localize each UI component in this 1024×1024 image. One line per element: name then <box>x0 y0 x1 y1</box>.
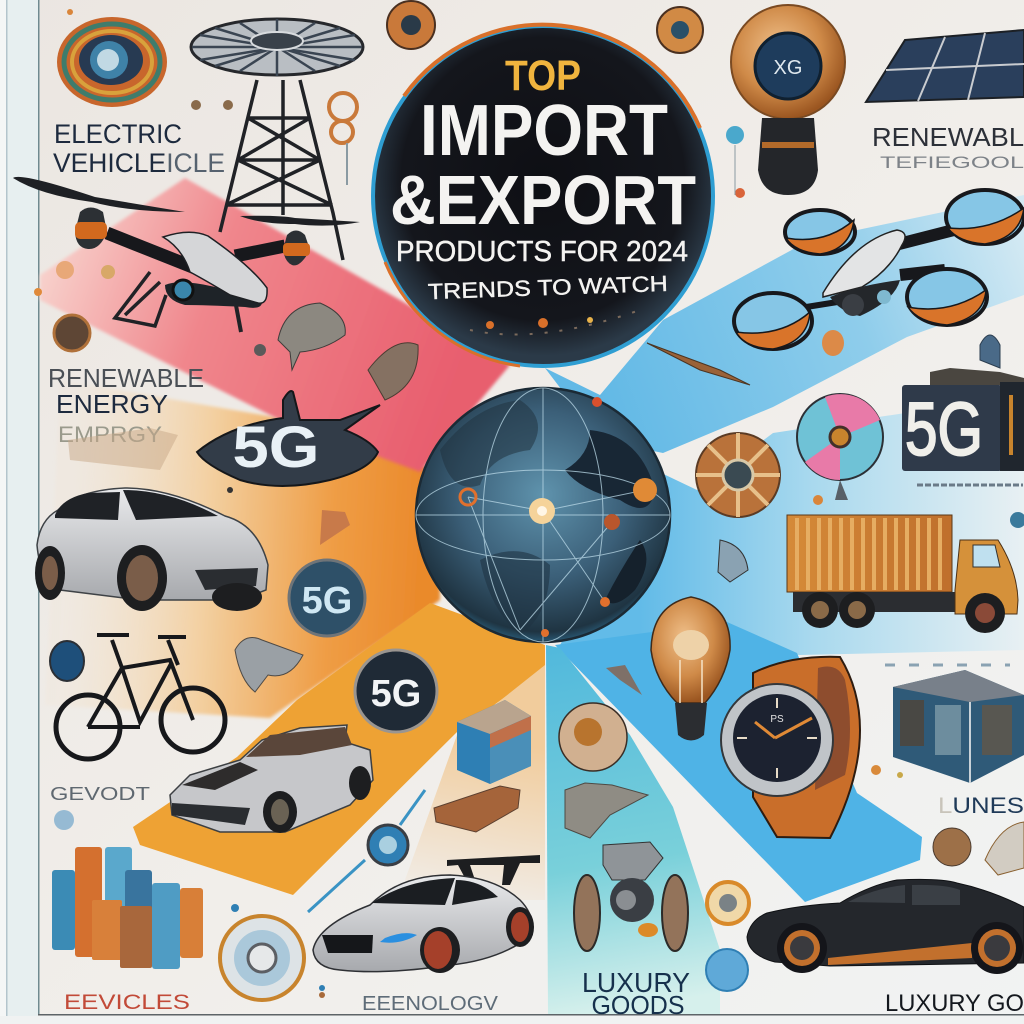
label: renewable top right <box>872 122 1024 172</box>
icon: delivery truck <box>787 515 1018 633</box>
icon: shell object <box>985 822 1024 875</box>
icon: bicycle <box>56 635 225 759</box>
icon: right bulb <box>731 5 845 195</box>
title badge <box>373 25 713 366</box>
colour wedge: upper blue band <box>545 195 1024 453</box>
icon: small silver ornament near blue <box>606 665 642 695</box>
label: renewable top right: RENEWABL <box>872 122 1024 152</box>
icon: stacked coins <box>52 847 203 969</box>
icon: small round badge <box>50 641 84 681</box>
icon: bronze ring emblem <box>220 916 304 1000</box>
icon: wheeled robot <box>574 842 688 951</box>
icon: wristwatch <box>721 657 860 838</box>
label: renewable energy left: ENERGY <box>56 389 168 419</box>
icon: wristwatch: PS <box>770 714 784 725</box>
colour wedge: upper orange <box>45 380 440 718</box>
label: renewable energy left <box>48 363 204 447</box>
label: renewable energy left: RENEWABLE <box>48 363 204 393</box>
icon: 5G tower <box>191 19 363 260</box>
colour wedge: pale orange under box <box>405 665 545 900</box>
icon: silver car on orange <box>170 725 373 833</box>
label: govdot: GEVODT <box>50 784 150 804</box>
icon: bronze swirl <box>933 828 971 866</box>
rotor: front right <box>907 269 987 325</box>
icon: small book stack <box>434 786 520 832</box>
label: renewable energy left: EMPRGY <box>58 422 162 447</box>
icon: small bronze object <box>368 343 418 400</box>
colour wedge: teal <box>546 645 720 1014</box>
icon: blue coin <box>706 949 748 991</box>
rotor: back left <box>785 210 855 254</box>
label: luxury goods center <box>582 967 690 1020</box>
label: vehicles: EEVICLES <box>64 991 190 1014</box>
rotor: back right <box>946 190 1024 244</box>
icon: solar panel <box>866 30 1024 102</box>
icon: 5G badge upper: 5G <box>302 580 352 622</box>
icon: sports car <box>313 855 540 973</box>
icon: small top right ornament <box>657 7 703 53</box>
label: electric vehicle: VEHICLEICLE <box>53 148 225 178</box>
icon: orange ball <box>822 330 844 356</box>
icon: 5G box <box>902 368 1024 471</box>
colour wedge: mid blue <box>560 395 1024 655</box>
icon: small cage tower <box>980 335 1000 368</box>
icon: 5G badge upper <box>289 560 365 636</box>
label: electric vehicle: ELECTRIC <box>54 119 182 149</box>
title: export: &EXPORT <box>390 161 696 239</box>
icon: 5G box: 5G <box>905 387 983 471</box>
subtitle: trends: TRENDS TO WATCH <box>427 271 668 304</box>
label: lunes: LUNES <box>938 793 1024 818</box>
icon: small rings near tower <box>329 93 357 185</box>
colour wedge: pink <box>40 178 510 472</box>
icon: colour wheel fan <box>797 394 883 500</box>
icon: small gold ornament <box>565 783 648 838</box>
icon: blue medallion <box>368 825 408 865</box>
subtitle: products: PRODUCTS FOR 2024 <box>396 236 688 268</box>
icon: silver clamp object <box>235 638 303 692</box>
icon: cube right <box>893 670 1024 783</box>
label: renewable top right: TEFIEGOOL <box>880 153 1024 172</box>
rotor: front left <box>734 293 812 349</box>
icon: 5G badge lower <box>355 650 437 732</box>
icon: blue connector line <box>308 790 425 912</box>
icon: bronze sphere <box>559 703 627 771</box>
icon: 5G saucer <box>197 391 380 486</box>
icon: right drone <box>734 190 1024 349</box>
icon: small top ornament <box>387 1 435 49</box>
globe with trade network <box>416 388 670 642</box>
icon: light bulb <box>651 597 730 740</box>
icon: 5G badge lower: 5G <box>371 673 421 715</box>
label: luxury goods center: GOODS <box>592 990 684 1020</box>
colour wedge: lower blue <box>555 622 922 902</box>
title: top: TOP <box>505 52 581 100</box>
icon: rainbow emblem top left <box>57 17 167 107</box>
icon: right bulb: XG <box>774 57 802 79</box>
icon: stacked box <box>457 700 531 784</box>
icon: small badge <box>54 315 90 351</box>
colour wedge: lower orange <box>133 603 545 895</box>
icon: round bronze emblem <box>696 433 780 517</box>
icon: 5G saucer: 5G <box>232 415 320 480</box>
icon: left drone <box>13 177 360 332</box>
title: import: IMPORT <box>420 91 668 171</box>
label: luxury goods center: LUXURY <box>582 967 690 998</box>
icon: black sedan <box>747 879 1024 974</box>
icon: gold ring <box>707 882 749 924</box>
label: technology: EEENOLOGV <box>362 993 499 1015</box>
label: electric vehicle <box>53 119 225 178</box>
icon: small silver mushroom <box>278 303 345 370</box>
icon: white SUV <box>35 488 268 611</box>
icon: paper plane <box>647 343 750 385</box>
label: luxury goods right: LUXURY GO <box>885 990 1024 1017</box>
